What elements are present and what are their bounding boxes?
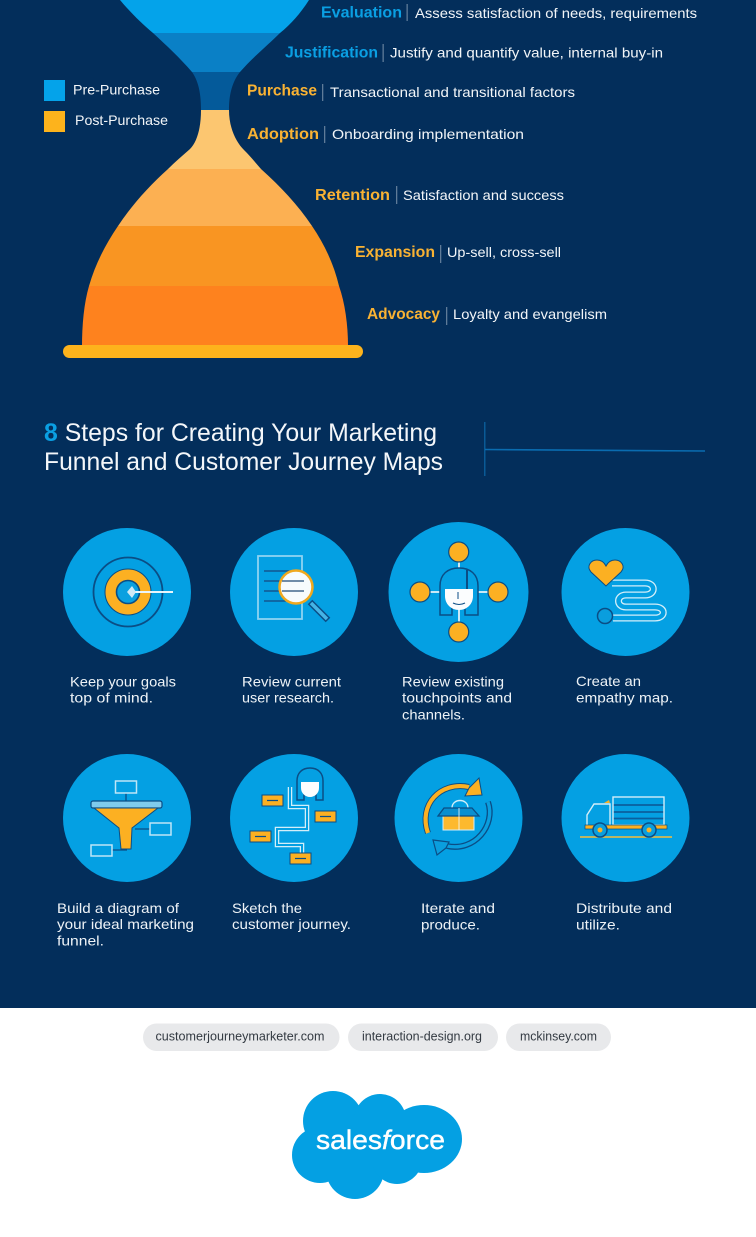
- step 3: touchpoints: [388, 522, 528, 722]
- legend: post-purchase swatch: [44, 111, 65, 132]
- step 6 caption: Sketch the: [232, 900, 302, 916]
- step 5: funnel diagram: [57, 754, 194, 948]
- step 1 badge: [63, 528, 191, 656]
- stage: Retention: [315, 186, 564, 204]
- step 2 caption: [242, 674, 341, 706]
- icon: heart and winding path: [589, 560, 663, 624]
- stage: Justification: Justify and quantify value, internal buy-in: [390, 44, 663, 60]
- icon: document and magnifier: [258, 556, 328, 620]
- stage: Retention: Satisfaction and success: [403, 187, 564, 203]
- stage: Purchase: Transactional and transitional factors: [330, 84, 575, 100]
- legend: [44, 80, 168, 132]
- logo cloud: [292, 1091, 462, 1199]
- stage: Adoption: [247, 126, 524, 143]
- stage labels: [247, 4, 697, 325]
- step 3 badge: [388, 522, 528, 662]
- source: interaction-design.org: interaction-design.org: [362, 1030, 482, 1044]
- step 6: customer journey: [230, 754, 358, 932]
- icon: target: [94, 558, 173, 626]
- step 5 caption: Build a diagram of: [57, 900, 179, 916]
- hourglass funnel chart: [63, 0, 363, 358]
- funnel segment: Retention: [118, 169, 312, 226]
- legend: pre-purchase label: Pre-Purchase: [73, 82, 160, 98]
- stage: Advocacy: Loyalty and evangelism: [453, 306, 607, 322]
- step 1: goals: [63, 528, 191, 706]
- source: customerjourneymarketer.com: customerjourneymarketer.com: [156, 1030, 324, 1044]
- funnel segment: Justification: [153, 33, 280, 72]
- step 8 caption: Distribute and: [576, 900, 672, 916]
- stage: Retention: Retention: [315, 187, 390, 204]
- step 7 caption: produce.: [421, 916, 480, 932]
- step 4 badge: [562, 528, 690, 656]
- source: customerjourneymarketer.com: [143, 1024, 340, 1051]
- step 3 caption: touchpoints and: [402, 690, 512, 706]
- step 7: iterate: [394, 754, 522, 932]
- step 3 caption: [402, 674, 512, 722]
- source pills: [143, 1024, 611, 1051]
- funnel segment: Purchase: [192, 72, 240, 110]
- step 6 caption: [232, 900, 351, 932]
- stage: Evaluation: Assess satisfaction of needs, requirements: [415, 5, 697, 21]
- step 5 caption: funnel.: [57, 932, 104, 948]
- funnel segment: Evaluation: [120, 0, 309, 33]
- source: interaction-design.org: [348, 1024, 498, 1051]
- step 4 caption: empathy map.: [576, 690, 673, 706]
- section heading: 8 Steps for Creating Your Marketing: [44, 419, 437, 447]
- step 2 badge: [230, 528, 358, 656]
- source: mckinsey.com: [506, 1024, 611, 1051]
- step 2: research: [230, 528, 358, 706]
- step 7 caption: Iterate and: [421, 900, 495, 916]
- step 5 caption: your ideal marketing: [57, 916, 194, 932]
- funnel segment: Adoption: [168, 110, 261, 169]
- step 2 caption: user research.: [242, 690, 334, 706]
- funnel segment: Advocacy: [82, 286, 348, 346]
- stage: Evaluation: [321, 4, 697, 22]
- icon: journey sketch: [250, 768, 336, 864]
- step 4: empathy map: [562, 528, 690, 706]
- stage: Advocacy: Advocacy: [367, 306, 440, 323]
- step 3 caption: Review existing: [402, 674, 504, 690]
- stage: Expansion: [355, 244, 561, 263]
- step 8 badge: [562, 754, 690, 882]
- section heading: [44, 419, 443, 476]
- source: mckinsey.com: mckinsey.com: [520, 1030, 597, 1044]
- stage: Expansion: Expansion: [355, 244, 435, 261]
- step 2 caption: Review current: [242, 674, 341, 690]
- stage: Justification: Justification: [285, 44, 378, 62]
- stage: Expansion: Up-sell, cross-sell: [447, 244, 561, 260]
- hourglass base: [63, 345, 363, 358]
- icon: cycle arrows and box: [426, 778, 490, 855]
- stage: Purchase: [247, 82, 575, 101]
- salesforce logo: [292, 1091, 462, 1199]
- step 1 caption: top of mind.: [70, 690, 153, 706]
- step 7 badge: [394, 754, 522, 882]
- section heading: Funnel and Customer Journey Maps: [44, 448, 443, 476]
- stage: Evaluation: Evaluation: [321, 4, 402, 22]
- step 6 badge: [230, 754, 358, 882]
- stage: Adoption: Onboarding implementation: [332, 126, 524, 142]
- legend: post-purchase label: Post-Purchase: [75, 112, 168, 128]
- stage: Adoption: Adoption: [247, 126, 319, 143]
- stage: Purchase: Purchase: [247, 82, 317, 100]
- step 3 caption: channels.: [402, 706, 465, 722]
- step 5 badge: [63, 754, 191, 882]
- step 4 caption: Create an: [576, 673, 641, 689]
- step 4 caption: [576, 673, 673, 706]
- icon: person with touchpoints: [410, 542, 508, 642]
- step 7 caption: [421, 900, 495, 932]
- step 8 caption: [576, 900, 672, 932]
- icon: funnel with boxes: [91, 781, 171, 856]
- legend: pre-purchase swatch: [44, 80, 65, 101]
- step 1 caption: Keep your goals: [70, 674, 176, 690]
- step 8: distribute: [562, 754, 690, 932]
- logo wordmark: salesforce: [316, 1125, 445, 1155]
- step 1 caption: [70, 674, 176, 706]
- step 8 caption: utilize.: [576, 916, 620, 932]
- funnel segment: Expansion: [89, 226, 339, 286]
- icon: delivery truck: [580, 797, 672, 837]
- stage: Justification: [285, 44, 663, 62]
- step 5 caption: [57, 900, 194, 948]
- stage: Advocacy: [367, 306, 607, 325]
- step 6 caption: customer journey.: [232, 916, 351, 932]
